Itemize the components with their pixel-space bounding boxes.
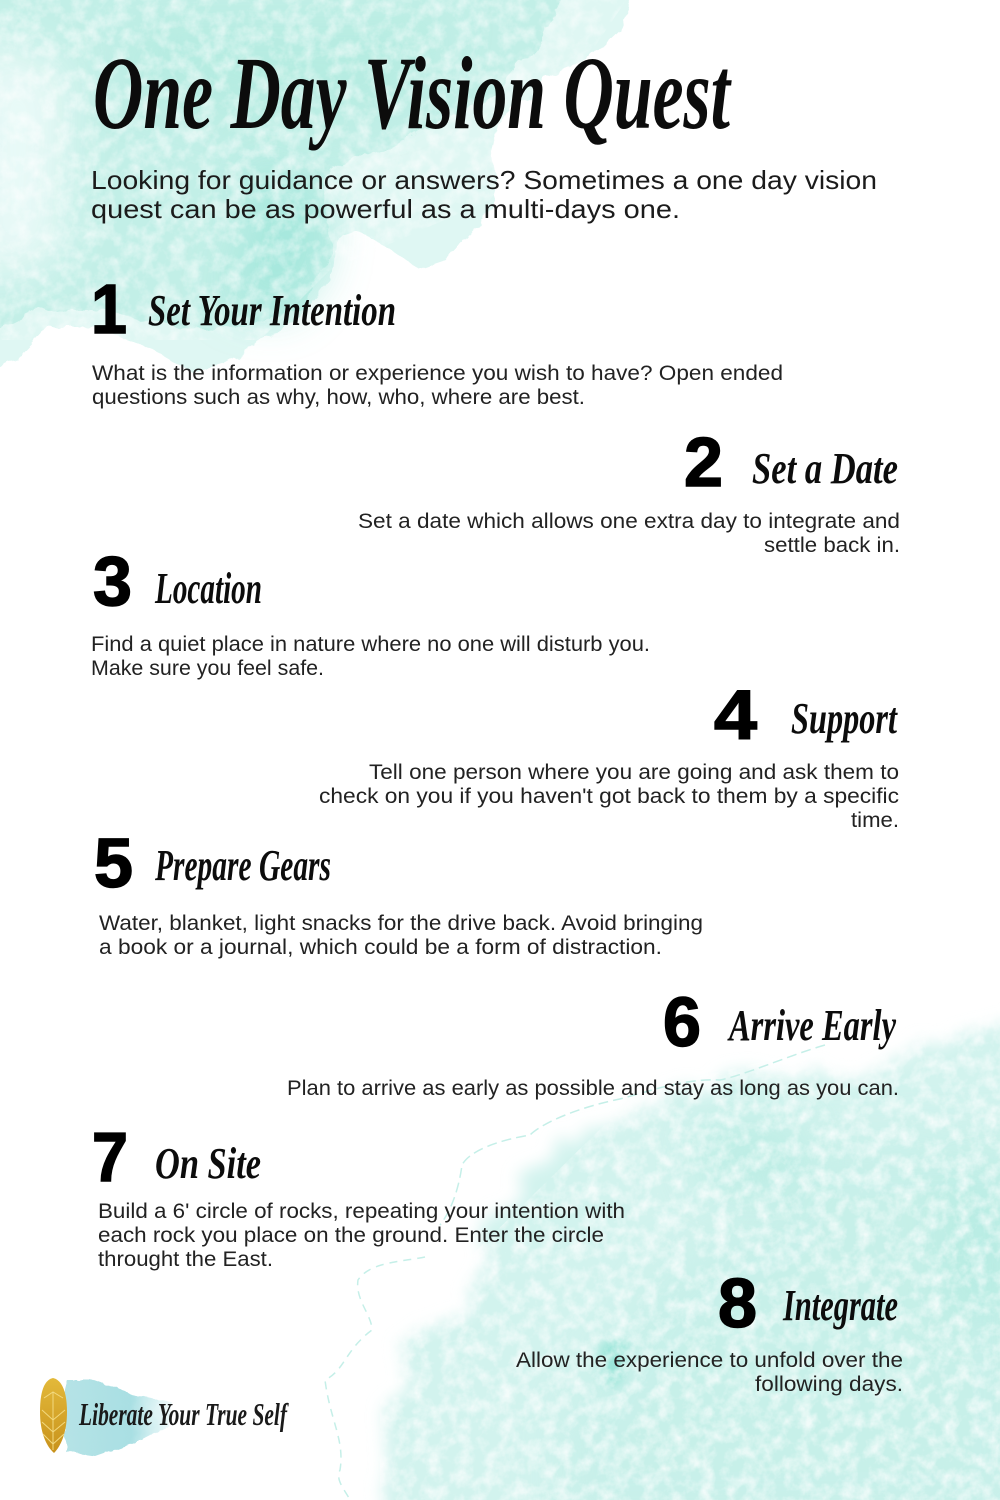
step 2: set a date bbox=[358, 423, 900, 557]
body 1: questions such as why, how, who, where are best. bbox=[92, 386, 585, 409]
body 2: Set a date which allows one extra day to integrate and bbox=[358, 510, 900, 533]
body 4: Tell one person where you are going and ask them to bbox=[369, 761, 899, 784]
body 5 bbox=[99, 912, 703, 959]
step 7: on site bbox=[92, 1118, 625, 1271]
body 8: Allow the experience to unfold over the bbox=[516, 1349, 903, 1372]
body 2 bbox=[358, 510, 900, 557]
number 4: 4 bbox=[714, 676, 757, 754]
body 8: following days. bbox=[755, 1373, 903, 1396]
logo text: Liberate Your True Self bbox=[78, 1396, 289, 1432]
step 6: arrive early bbox=[287, 983, 899, 1100]
logo watercolor smear bbox=[66, 1380, 172, 1456]
body 1: What is the information or experience you wish to have? Open ended bbox=[92, 362, 783, 385]
body 8 bbox=[516, 1349, 903, 1396]
heading 2: Set a Date bbox=[752, 444, 898, 493]
number 2: 2 bbox=[684, 423, 723, 501]
heading 4: Support bbox=[791, 694, 898, 743]
body 2: settle back in. bbox=[764, 534, 900, 557]
number 6: 6 bbox=[663, 983, 701, 1061]
body 7: each rock you place on the ground. Enter the circle bbox=[98, 1224, 604, 1247]
intro text bbox=[91, 165, 877, 224]
body 7: Build a 6' circle of rocks, repeating your intention with bbox=[98, 1200, 625, 1223]
intro text: quest can be as powerful as a multi-days one. bbox=[91, 194, 680, 224]
heading 1: Set Your Intention bbox=[148, 286, 396, 335]
body 3: Make sure you feel safe. bbox=[91, 657, 324, 680]
logo: liberate your true self bbox=[40, 1378, 289, 1456]
heading 8: Integrate bbox=[782, 1281, 898, 1330]
body 3 bbox=[91, 633, 650, 680]
number 3: 3 bbox=[93, 542, 132, 620]
body 4: check on you if you haven't got back to them by a specific bbox=[319, 785, 899, 808]
body 5: Water, blanket, light snacks for the drive back. Avoid bringing bbox=[99, 912, 703, 935]
step 8: integrate bbox=[516, 1264, 903, 1396]
body 6: Plan to arrive as early as possible and stay as long as you can. bbox=[287, 1077, 899, 1100]
number 7: 7 bbox=[92, 1118, 128, 1196]
body 4 bbox=[319, 761, 899, 832]
watercolor: bottom-right wash bbox=[325, 1000, 1000, 1500]
step 1: set your intention bbox=[91, 270, 783, 409]
number 1: 1 bbox=[91, 270, 127, 348]
heading 5: Prepare Gears bbox=[154, 841, 331, 890]
body 4: time. bbox=[851, 809, 899, 832]
intro text: Looking for guidance or answers? Sometimes a one day vision bbox=[91, 165, 877, 195]
heading 7: On Site bbox=[155, 1139, 261, 1188]
number 5: 5 bbox=[94, 824, 133, 902]
body 1 bbox=[92, 362, 783, 409]
body 7 bbox=[98, 1200, 625, 1271]
step 5: prepare gears bbox=[94, 824, 703, 959]
body 5: a book or a journal, which could be a form of distraction. bbox=[99, 936, 662, 959]
step 3: location bbox=[91, 542, 650, 680]
watercolor: top-left wash bbox=[0, 0, 640, 376]
body 3: Find a quiet place in nature where no one will disturb you. bbox=[91, 633, 650, 656]
body 7: throught the East. bbox=[98, 1248, 273, 1271]
step 4: support bbox=[319, 676, 899, 832]
icon: gold feather bbox=[40, 1378, 67, 1453]
heading 3: Location bbox=[154, 564, 262, 613]
number 8: 8 bbox=[718, 1264, 757, 1342]
heading 6: Arrive Early bbox=[727, 1001, 896, 1050]
